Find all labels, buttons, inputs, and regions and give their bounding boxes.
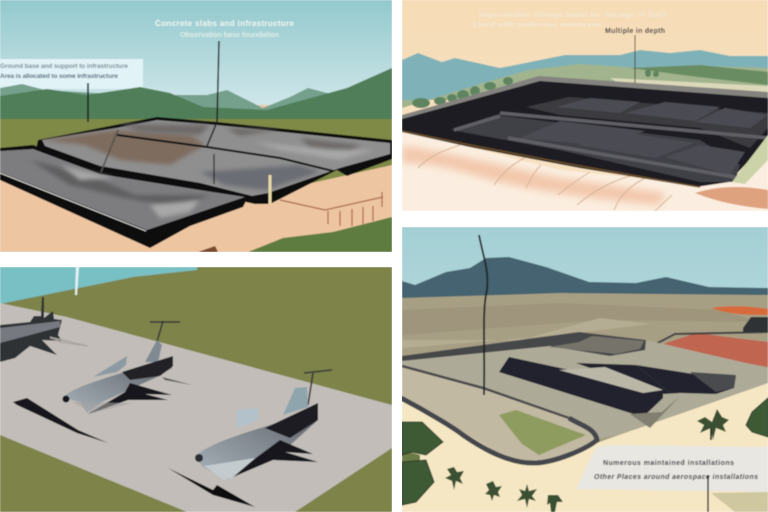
label pole — [605, 28, 665, 83]
apron — [0, 303, 392, 512]
callout: Ground base and support to infrastructure — [0, 63, 128, 70]
tower line — [479, 235, 487, 395]
heading: Observation base foundation — [180, 30, 279, 39]
panel: black lined storage basin — [402, 0, 768, 211]
callout: Other Places around aerospace installations — [594, 474, 758, 481]
sand bank — [402, 130, 768, 211]
callout: Numerous maintained installations — [603, 460, 734, 467]
fence — [280, 192, 383, 226]
aircraft: right — [168, 370, 332, 507]
faded heading: Lined with protective membrane — [473, 20, 601, 29]
slab: front — [0, 145, 248, 248]
palm trees — [402, 398, 768, 512]
tree line — [412, 69, 659, 108]
callout — [576, 445, 768, 512]
faded heading: Impermeable storage basin for storage of fuels — [479, 10, 667, 19]
faded heading — [473, 12, 667, 28]
slabs: rear and middle — [36, 117, 392, 204]
poles — [88, 41, 270, 204]
grass and road — [401, 366, 598, 465]
aircraft: centre — [13, 321, 192, 443]
callout — [0, 59, 143, 89]
basin — [402, 76, 768, 187]
heading — [155, 19, 295, 39]
red roofed field — [654, 333, 768, 367]
callout: Area is allocated to some infrastructure — [0, 73, 118, 80]
compound — [402, 332, 768, 445]
label pole: Multiple in depth — [605, 28, 665, 35]
heading: Concrete slabs and infrastructure — [155, 19, 295, 28]
plain — [402, 292, 768, 443]
aircraft: left — [0, 297, 88, 362]
panel: aircraft on apron — [0, 267, 392, 512]
panel: airfield compound with palms — [401, 227, 768, 512]
panel: concrete slabs beneath teal sky — [0, 0, 392, 252]
